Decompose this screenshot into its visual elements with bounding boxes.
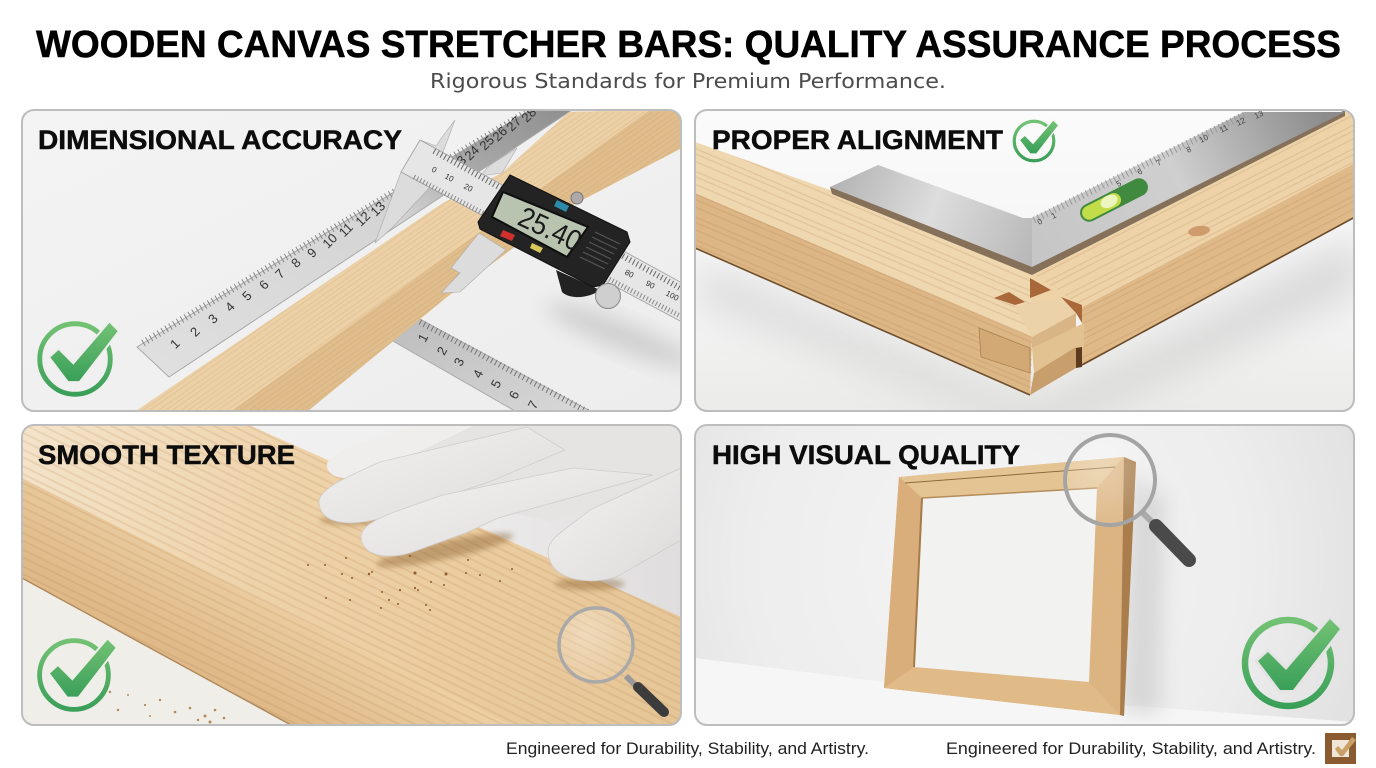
red button <box>500 230 515 241</box>
caliper scale numbers: 20 <box>462 182 475 194</box>
sawdust on bar <box>307 549 513 611</box>
steel square: 1 <box>1050 211 1058 221</box>
steel ruler lower: 3 <box>451 355 467 369</box>
white glove <box>319 425 681 581</box>
yellow button <box>530 243 543 253</box>
caliper scale numbers <box>430 165 681 303</box>
steel ruler behind bar: 5 <box>239 288 255 304</box>
icon: green check <box>40 640 116 709</box>
steel ruler behind bar: 9 <box>304 245 320 261</box>
LCD reading: 25.40 <box>513 201 586 258</box>
caliper scale numbers: 100 <box>664 289 681 303</box>
panel border <box>695 425 1354 725</box>
panel: proper alignment <box>695 108 1360 430</box>
caliper jaws <box>375 120 517 293</box>
steel ruler behind bar: 28 <box>518 104 539 125</box>
speaker grille <box>580 232 620 269</box>
square scale <box>1034 115 1244 220</box>
steel ruler lower: 1 <box>415 331 431 345</box>
panel border <box>22 110 681 411</box>
steel ruler behind bar: 1 <box>167 336 183 352</box>
panel: smooth texture <box>22 425 681 726</box>
finger four <box>548 468 681 581</box>
steel ruler behind bar: 3 <box>205 311 221 327</box>
table surface <box>22 579 291 726</box>
panel: high visual quality <box>695 425 1354 725</box>
frame opening <box>914 488 1097 682</box>
caliper scale numbers: 10 <box>443 172 456 184</box>
steel square: 6 <box>1136 167 1144 177</box>
steel square <box>830 108 1345 275</box>
footer note right: Engineered for Durability, Stability, and Artistry. <box>946 740 1316 758</box>
steel ruler lower: 6 <box>506 388 522 402</box>
steel ruler behind bar: 26 <box>489 123 510 144</box>
panel border <box>695 110 1354 411</box>
steel square: 7 <box>1155 158 1163 168</box>
steel ruler lower: 4 <box>470 367 486 381</box>
steel ruler behind bar: 7 <box>272 266 288 282</box>
subtitle: Rigorous Standards for Premium Performance. <box>430 69 946 93</box>
frame shadow <box>1122 470 1165 715</box>
right wooden bar <box>1032 108 1356 365</box>
heading: PROPER ALIGNMENT <box>712 125 1003 155</box>
steel square: 12 <box>1235 115 1247 128</box>
steel square: 10 <box>1198 132 1210 145</box>
steel ruler lower: 7 <box>525 398 541 412</box>
floor <box>695 658 1354 725</box>
steel ruler behind bar: 6 <box>256 277 272 293</box>
magnifier <box>559 608 664 712</box>
steel ruler behind bar: 25 <box>476 132 497 153</box>
wooden bar <box>136 110 682 411</box>
wooden frame <box>884 457 1136 716</box>
panel 2 photo <box>695 108 1360 430</box>
icon: green check <box>1245 619 1340 706</box>
steel ruler behind bar: 10 <box>319 230 340 251</box>
panel 1 photo <box>22 104 699 412</box>
steel ruler behind bar: 11 <box>336 220 356 240</box>
title: WOODEN CANVAS STRETCHER BARS: QUALITY ASSURANCE PROCESS <box>36 24 1341 66</box>
finger one <box>327 425 475 478</box>
panel 3 photo <box>22 425 681 726</box>
panel border <box>22 425 681 725</box>
glove shadow <box>320 515 625 590</box>
steel ruler behind bar: 8 <box>288 255 304 271</box>
display body <box>478 175 630 287</box>
steel ruler lower: 2 <box>434 344 450 358</box>
steel ruler behind bar: 27 <box>503 113 524 134</box>
steel ruler behind bar: 23 <box>448 152 469 173</box>
steel ruler lower: 5 <box>488 377 504 391</box>
thumb wheel <box>556 270 600 297</box>
steel ruler behind bar: 24 <box>461 142 482 163</box>
left wooden bar <box>695 142 1032 395</box>
steel ruler behind bar: 12 <box>352 208 373 229</box>
steel square: 13 <box>1253 108 1265 121</box>
silver thumb knob <box>596 284 620 308</box>
steel square: 0 <box>1036 217 1044 227</box>
steel square: 11 <box>1218 123 1230 135</box>
corner joint <box>979 278 1084 395</box>
caliper beam <box>401 140 682 322</box>
footer note left: Engineered for Durability, Stability, and Artistry. <box>506 740 869 758</box>
panel: dimensional accuracy <box>22 104 699 412</box>
steel ruler behind bar: 4 <box>222 299 238 315</box>
caliper scale numbers: 80 <box>623 268 636 280</box>
steel ruler lower <box>393 318 590 412</box>
icon: green check <box>1014 121 1058 161</box>
icon: framed check <box>1325 733 1356 764</box>
steel ruler behind bar: 2 <box>187 324 203 340</box>
caliper scale numbers: 0 <box>430 165 439 175</box>
back of hand <box>414 426 475 452</box>
finger three <box>361 468 653 556</box>
steel square: 5 <box>1115 179 1123 189</box>
finger two <box>319 427 565 523</box>
panel 4 photo <box>695 425 1354 725</box>
heading: SMOOTH TEXTURE <box>38 440 295 470</box>
sawdust on table <box>109 691 225 724</box>
caliper shadow <box>548 298 680 372</box>
caliper scale numbers: 90 <box>644 279 657 291</box>
steel ruler behind bar: 13 <box>367 198 388 219</box>
digital caliper <box>375 120 682 322</box>
heading: DIMENSIONAL ACCURACY <box>38 125 402 155</box>
magnifier <box>1065 435 1189 560</box>
bar shadow <box>698 239 1353 410</box>
top screw <box>571 192 583 204</box>
steel square: 8 <box>1185 145 1193 155</box>
spirit level <box>1080 178 1148 222</box>
blue button <box>554 200 569 212</box>
heading: HIGH VISUAL QUALITY <box>712 440 1020 470</box>
LCD screen <box>492 192 588 257</box>
wood knot <box>1188 226 1210 236</box>
wooden bar <box>22 425 681 725</box>
steel ruler behind bar <box>137 104 572 377</box>
icon: green check <box>40 323 118 394</box>
